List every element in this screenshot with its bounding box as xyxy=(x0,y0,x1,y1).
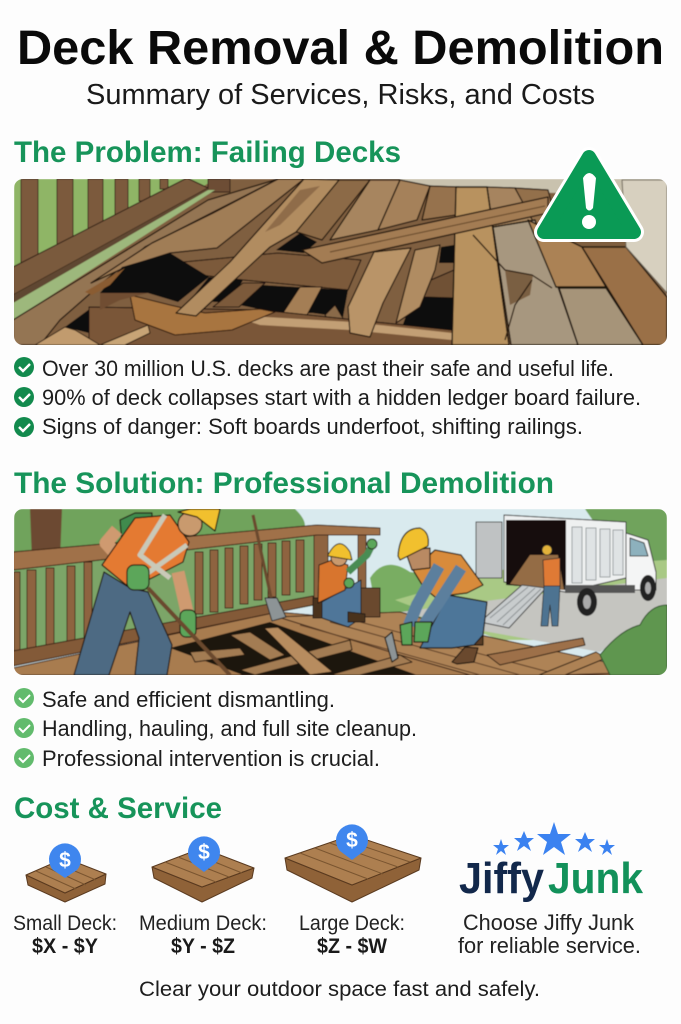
footer tagline: Clear your outdoor space fast and safely. xyxy=(139,978,540,1001)
loose boards xyxy=(487,638,585,665)
grass and drive xyxy=(395,560,667,640)
ramp xyxy=(480,585,546,628)
title: Deck Removal & Demolition xyxy=(17,22,664,75)
logo wordmark: Jiffy xyxy=(459,854,544,903)
panel: small deck cost xyxy=(13,843,117,958)
bullet 3: Professional intervention is crucial. xyxy=(42,746,380,771)
panel: demolition crew illustration xyxy=(13,509,667,675)
heading: the solution: The Solution: Professional Demolition xyxy=(14,467,554,500)
struts under deck xyxy=(283,287,322,315)
panel: large deck cost xyxy=(285,824,421,958)
truck xyxy=(476,522,502,578)
deck boards back xyxy=(400,179,667,195)
panel: medium deck cost: Medium Deck: xyxy=(139,912,267,935)
bush xyxy=(600,605,667,675)
deck xyxy=(13,612,667,675)
icon: medium deck xyxy=(152,848,254,902)
icon: rating stars xyxy=(493,822,615,855)
cracks xyxy=(505,270,533,305)
heading: the problem: The Problem: Failing Decks xyxy=(14,136,401,169)
worker right with hammer xyxy=(385,528,487,664)
bottom beam xyxy=(89,307,452,345)
panel: medium deck cost xyxy=(139,836,267,958)
right planks xyxy=(452,187,667,345)
panel: Jiffy Junk brand: for reliable service. xyxy=(458,933,641,958)
trees xyxy=(14,509,306,552)
left rotten boards xyxy=(85,268,125,295)
icon: small deck xyxy=(26,858,106,902)
list: solution bullets xyxy=(14,687,417,771)
shovel xyxy=(253,515,272,602)
logo wordmark xyxy=(459,854,643,903)
panel: rotting deck illustration xyxy=(13,178,667,345)
deck rail xyxy=(13,178,208,295)
bullet 1: Over 30 million U.S. decks are past their safe and useful life. xyxy=(42,356,614,381)
joists xyxy=(183,253,361,290)
icon: large deck xyxy=(285,835,421,902)
icon: price pin: $ xyxy=(346,829,358,852)
lying board xyxy=(302,197,548,263)
subtitle: Summary of Services, Risks, and Costs xyxy=(86,79,595,111)
logo wordmark: Junk xyxy=(548,854,643,903)
icon: price pin: $ xyxy=(59,849,71,872)
fence backing xyxy=(14,535,317,660)
panel: large deck cost: Large Deck: xyxy=(299,912,405,935)
worker left with pry bar xyxy=(74,509,220,675)
siding xyxy=(622,180,667,293)
panel: small deck cost: $X - $Y xyxy=(32,935,98,958)
broken planks xyxy=(348,248,411,337)
list: problem bullets xyxy=(14,356,641,439)
bullet 2: 90% of deck collapses start with a hidden ledger board failure. xyxy=(42,385,641,410)
bullet 1: Safe and efficient dismantling. xyxy=(42,687,335,712)
bullet 2: Handling, hauling, and full site cleanup. xyxy=(42,716,417,741)
worker kneeling back xyxy=(313,539,380,627)
icon: warning triangle xyxy=(544,157,634,232)
panel: Jiffy Junk brand: Choose Jiffy Junk xyxy=(463,910,635,935)
panel: large deck cost: $Z - $W xyxy=(317,935,387,958)
bullet 3: Signs of danger: Soft boards underfoot, shifting railings. xyxy=(42,414,583,439)
icon: price pin: $ xyxy=(198,841,210,864)
heading: cost and service: Cost & Service xyxy=(14,792,222,825)
driver xyxy=(541,545,560,626)
panel: Jiffy Junk brand xyxy=(458,822,643,958)
holes xyxy=(65,233,454,333)
panel: small deck cost: Small Deck: xyxy=(13,912,117,935)
center plank xyxy=(176,179,339,316)
panel: medium deck cost: $Y - $Z xyxy=(171,935,235,958)
